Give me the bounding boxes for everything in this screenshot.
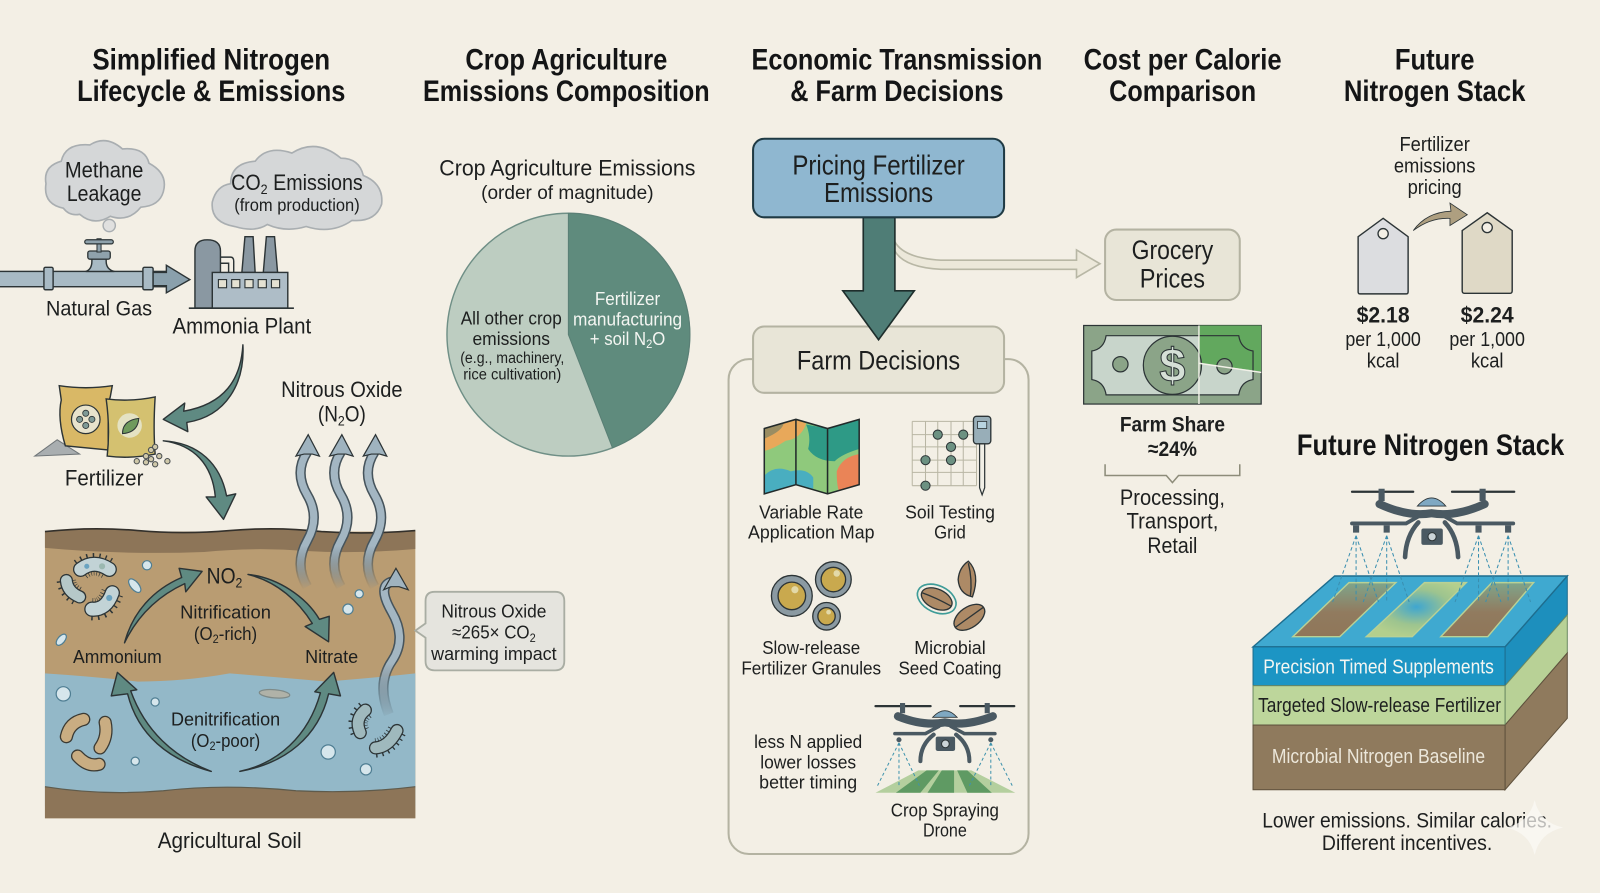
panel: crop agriculture emissions [423, 43, 710, 456]
icon: slow-release granules [771, 562, 851, 630]
heading: nitrogen lifecycle: Lifecycle & Emissions [77, 75, 345, 108]
pie label: other emissions: All other crop [461, 307, 562, 328]
diagram: agricultural soil layers [45, 529, 415, 818]
heading: future nitrogen stack: Future [1395, 43, 1474, 76]
box: grocery prices [1105, 230, 1240, 300]
label: microbial seed coating: Microbial [914, 637, 986, 658]
icon: microbial seed coating [913, 561, 989, 636]
pie chart [447, 213, 690, 456]
stat: price after: kcal [1471, 350, 1504, 372]
arrows: nitrous oxide rising [296, 435, 408, 714]
heading: future nitrogen stack: Nitrogen Stack [1344, 75, 1526, 108]
label: microbial seed coating [898, 637, 1002, 678]
callout: nitrous oxide warming impact [415, 592, 564, 670]
stat: price before: kcal [1367, 350, 1399, 372]
bubbles [54, 561, 372, 775]
pie label: fertilizer share: + soil N [590, 328, 652, 349]
stat: price before [1345, 302, 1421, 372]
label: microbial seed coating: Seed Coating [898, 657, 1002, 678]
stat: price after [1449, 302, 1525, 372]
callout: nitrous oxide warming impact: warming impact [430, 643, 557, 664]
label: nitrous oxide: Nitrous Oxide [281, 377, 403, 402]
cloud: methane leakage: Methane [65, 158, 143, 183]
icon: dollar bill farm share [1084, 325, 1261, 404]
label: nitrate: Nitrate [305, 646, 358, 667]
heading: nitrogen lifecycle [77, 43, 345, 108]
arrow: fertilizer to soil [163, 441, 236, 519]
arrow: denitrification to nitrate [240, 672, 340, 771]
stack label: slow-release: Targeted Slow-release Fertilizer [1258, 695, 1501, 717]
caption: closing statement [1262, 809, 1552, 855]
heading: economic transmission [752, 43, 1042, 108]
label: variable rate map: Variable Rate [759, 501, 863, 522]
pie label: other emissions: rice cultivation) [463, 367, 561, 384]
text: benefits: better timing [759, 772, 857, 793]
label: nitrous oxide [281, 377, 403, 429]
label: fertilizer: Fertilizer [65, 466, 143, 491]
label: denitrification: 2 [209, 739, 216, 753]
stat: price before: $2.18 [1357, 302, 1410, 327]
label: denitrification [171, 708, 280, 753]
label: ammonia plant: Ammonia Plant [172, 314, 311, 339]
arrow: to grocery prices [895, 242, 1100, 278]
heading: economic transmission: Economic Transmission [752, 43, 1042, 76]
pie label: fertilizer share: Fertilizer [595, 288, 660, 309]
icon: soil testing grid [912, 416, 991, 495]
label: soil testing grid: Soil Testing [905, 501, 995, 522]
pie label: other emissions [460, 307, 564, 384]
bracket: farm share breakdown [1105, 464, 1240, 483]
label: fertilizer emissions pricing: emissions [1394, 155, 1476, 177]
cloud: methane leakage [46, 141, 164, 232]
text: benefits: less N applied [754, 731, 862, 752]
bacteria: aerobic microbes [66, 563, 112, 609]
panel: economic transmission [729, 43, 1100, 854]
label: denitrification: Denitrification [171, 708, 280, 729]
label: crop spraying drone: Crop Spraying [891, 799, 999, 820]
icon: dollar bill farm share: $ [1159, 340, 1185, 392]
arrow: nitrification falling [248, 574, 329, 642]
heading: cost per calorie: Comparison [1109, 75, 1256, 108]
label: farm share [1120, 413, 1225, 461]
cloud: methane leakage: Leakage [67, 181, 141, 206]
pie label: fertilizer share: manufacturing [573, 308, 682, 329]
label: nitrous oxide: (N [318, 401, 341, 426]
box: grocery prices: Prices [1140, 264, 1205, 294]
label: nitrification: 2 [213, 632, 219, 646]
icon: fertilizer bags [35, 386, 170, 467]
text: other cost shares: Retail [1147, 533, 1197, 558]
label: slow-release granules [741, 637, 881, 678]
arrow: pricing to farm decisions [843, 217, 914, 340]
bacteria: anaerobic microbes [66, 710, 397, 765]
icon: natural gas pipeline [0, 239, 190, 293]
heading: nitrogen lifecycle: Simplified Nitrogen [92, 43, 330, 76]
icon: variable rate map [764, 419, 859, 494]
stack label: supplements: Precision Timed Supplements [1263, 656, 1494, 678]
box: farm decisions [753, 327, 1004, 393]
heading: emissions composition: Crop Agriculture [465, 43, 667, 76]
panel: nitrogen lifecycle [0, 43, 564, 853]
label: crop spraying drone [891, 799, 999, 841]
arrow: denitrification to ammonium [111, 672, 211, 771]
label: nitrification: Nitrification [180, 601, 271, 622]
text: benefits: lower losses [760, 751, 856, 772]
panel: cost per calorie comparison [1084, 43, 1282, 558]
box: grocery prices: Grocery [1132, 235, 1214, 265]
stat: price before: per 1,000 [1345, 329, 1421, 351]
icon: precision drone [1333, 489, 1531, 602]
heading: cost per calorie: Cost per Calorie [1084, 43, 1282, 76]
caption: closing statement: Lower emissions. Similar calories. [1262, 809, 1552, 832]
icon: price tag after [1462, 213, 1512, 293]
label: NO2: NO [207, 564, 240, 589]
subtitle: chart title [439, 155, 695, 204]
label: ammonium: Ammonium [73, 646, 162, 667]
sparkle watermark [1506, 800, 1563, 855]
label: agricultural soil: Agricultural Soil [158, 828, 302, 853]
box: pricing fertilizer emissions: Pricing Fertilizer [792, 149, 965, 180]
box: pricing fertilizer emissions: Emissions [824, 177, 933, 208]
label: fertilizer emissions pricing [1394, 134, 1476, 199]
label: natural gas: Natural Gas [46, 296, 152, 320]
label: nitrification: (O [194, 623, 215, 644]
cloud: CO2 emissions [212, 146, 382, 229]
label: farm share: Farm Share [1120, 413, 1225, 437]
icon: crop spraying drone [876, 703, 1015, 793]
heading: economic transmission: & Farm Decisions [790, 75, 1004, 108]
text: other cost shares: Processing, [1120, 485, 1225, 510]
label: slow-release granules: Fertilizer Granules [741, 657, 881, 678]
label: nitrous oxide: O) [345, 401, 366, 426]
pie label: fertilizer share: 2 [646, 337, 652, 351]
label: NO2: 2 [236, 576, 242, 592]
label: soil testing grid: Grid [934, 522, 966, 543]
label: nitrification: -rich) [219, 623, 257, 644]
heading: cost per calorie [1084, 43, 1282, 108]
caption: closing statement: Different incentives. [1322, 832, 1492, 855]
arrow: plant to fertilizer [163, 345, 243, 432]
label: farm share: ≈24% [1148, 437, 1197, 461]
panel: future nitrogen stack [1253, 43, 1567, 855]
cloud: CO2 emissions: (from production) [234, 195, 360, 215]
callout: nitrous oxide warming impact: Nitrous Oxide [441, 600, 546, 621]
pie label: fertilizer share: O [652, 328, 665, 349]
pie label: other emissions: (e.g., machinery, [460, 350, 564, 367]
label: nitrous oxide: 2 [338, 413, 345, 429]
subtitle: chart title: (order of magnitude) [481, 182, 654, 204]
text: other cost shares: Transport, [1127, 509, 1218, 534]
text: other cost shares [1120, 485, 1225, 558]
label: fertilizer emissions pricing: Fertilizer [1399, 134, 1470, 156]
heading: emissions composition: Emissions Composition [423, 75, 710, 108]
cloud: CO2 emissions: Emissions [268, 170, 363, 195]
heading: future nitrogen stack [1344, 43, 1526, 108]
text: benefits [754, 731, 862, 793]
label: slow-release granules: Slow-release [762, 637, 860, 658]
icon: ammonia plant [189, 237, 294, 308]
diagram: layered soil stack [1253, 576, 1567, 790]
label: soil testing grid [905, 501, 995, 543]
callout: nitrous oxide warming impact: 2 [530, 631, 536, 645]
arrow: nitrification rising [125, 568, 202, 643]
stack label: microbial baseline: Microbial Nitrogen Baseline [1272, 746, 1485, 768]
pie label: other emissions: emissions [472, 328, 550, 349]
label: fertilizer emissions pricing: pricing [1408, 177, 1462, 199]
label: crop spraying drone: Drone [923, 820, 967, 841]
pie label: fertilizer share [573, 288, 682, 351]
cloud: CO2 emissions: 2 [261, 182, 268, 198]
label: denitrification: (O [191, 730, 212, 751]
label: variable rate map [748, 501, 874, 543]
box: farm decisions container [729, 359, 1029, 854]
box: farm decisions: Farm Decisions [797, 345, 960, 375]
stat: price after: $2.24 [1461, 302, 1514, 327]
stat: price after: per 1,000 [1449, 329, 1525, 351]
label: variable rate map: Application Map [748, 522, 874, 543]
heading: emissions composition [423, 43, 710, 108]
heading: stack diagram: Future Nitrogen Stack [1297, 429, 1565, 462]
box: pricing fertilizer emissions [753, 139, 1004, 217]
cloud: CO2 emissions: CO [231, 170, 265, 195]
arrow: price increase [1413, 203, 1467, 231]
callout: nitrous oxide warming impact: ≈265× CO [452, 622, 538, 643]
label: nitrification [180, 601, 271, 646]
subtitle: chart title: Crop Agriculture Emissions [439, 155, 695, 180]
label: denitrification: -poor) [216, 730, 260, 751]
icon: price tag before [1358, 218, 1408, 294]
